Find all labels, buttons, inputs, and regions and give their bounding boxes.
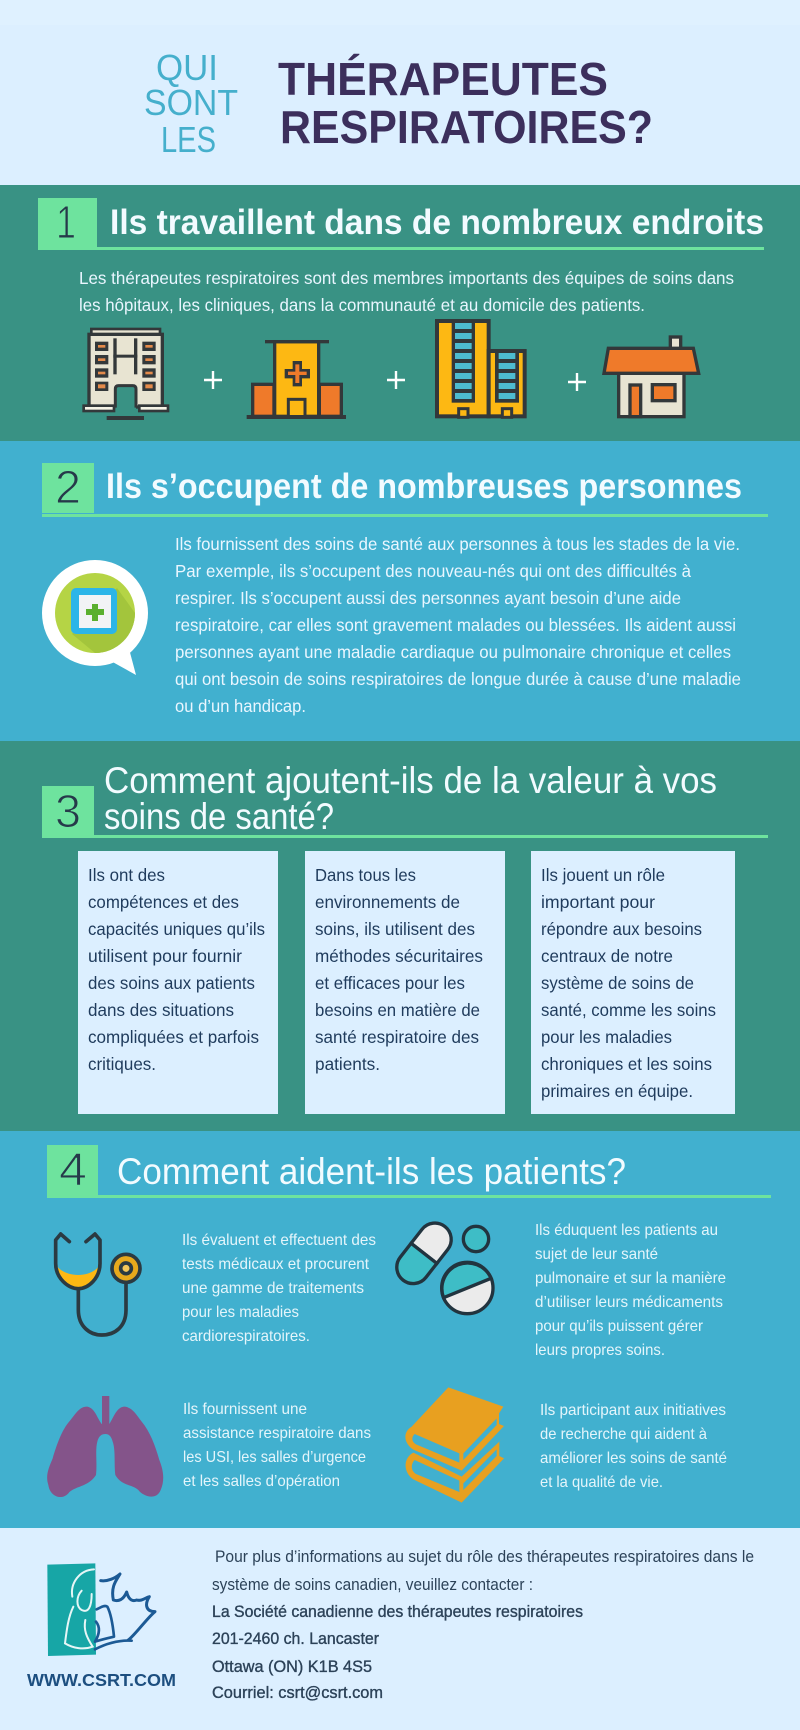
title: thérapeutes respiratoires: THÉRAPEUTES xyxy=(278,53,608,105)
text: tests and treatments xyxy=(182,1232,376,1345)
section 2 body text: qui ont besoin de soins respiratoires de longue durée à cause d’une maladie xyxy=(175,669,741,689)
section 2 heading: 2 xyxy=(55,461,81,513)
section 1 heading: Ils travaillent dans de nombreux endroits xyxy=(110,203,764,242)
footer contact text: système de soins canadien, veuillez contacter : xyxy=(212,1576,533,1594)
section 2 body text: Par exemple, ils s’occupent des nouveau-nés qui ont des difficultés à xyxy=(175,561,691,581)
section 2 body text: ou d’un handicap. xyxy=(175,696,306,716)
section 2 body text: respirer. Ils s’occupent aussi des personnes ayant besoin d’une aide xyxy=(175,588,681,608)
text: research: Ils participant aux initiatives xyxy=(540,1402,726,1419)
icon: speech bubble with medical cross xyxy=(42,560,148,675)
section 1 body text: Les thérapeutes respiratoires sont des membres importants des équipes de soins dans xyxy=(79,268,734,288)
panel: section 3 value xyxy=(0,741,800,1131)
card: safe methods xyxy=(305,851,505,1114)
card: skills: Ils ont des xyxy=(88,865,165,885)
text: patient education xyxy=(535,1222,726,1359)
panel: title header xyxy=(0,0,800,185)
icon: plus xyxy=(204,371,222,389)
title: qui sont les xyxy=(144,47,238,160)
card: safe methods: patients. xyxy=(315,1054,380,1074)
text: respiratory assistance: assistance respiratoire dans xyxy=(183,1425,371,1442)
logo: CSRT: WWW.CSRT.COM xyxy=(27,1670,176,1690)
card: skills: dans des situations xyxy=(88,1000,234,1020)
section 4 heading xyxy=(47,1143,771,1198)
icon: lungs xyxy=(47,1396,163,1497)
card: central needs: santé, comme les soins xyxy=(541,1000,716,1020)
footer contact text: 201-2460 ch. Lancaster xyxy=(212,1630,379,1648)
text: tests and treatments: Ils évaluent et effectuent des xyxy=(182,1232,376,1249)
text: tests and treatments: cardiorespiratoires. xyxy=(182,1328,310,1345)
icon: books xyxy=(405,1387,504,1503)
text: respiratory assistance: et les salles d’opération xyxy=(183,1473,340,1490)
footer contact text: La Société canadienne des thérapeutes respiratoires xyxy=(212,1603,583,1621)
text: research: de recherche qui aident à xyxy=(540,1426,707,1443)
icon: pills xyxy=(390,1216,493,1314)
text: patient education: sujet de leur santé xyxy=(535,1246,658,1263)
text: patient education: leurs propres soins. xyxy=(535,1342,665,1359)
card: central needs: centraux de notre xyxy=(541,946,673,966)
section 1 heading xyxy=(38,196,764,250)
card: central needs: répondre aux besoins xyxy=(541,919,702,939)
text: patient education: pulmonaire et sur la manière xyxy=(535,1270,726,1287)
card: safe methods: santé respiratoire des xyxy=(315,1027,479,1047)
card: safe methods: Dans tous les xyxy=(315,865,416,885)
section 4 heading: 4 xyxy=(59,1143,87,1195)
text: tests and treatments: tests médicaux et procurent xyxy=(182,1256,370,1273)
icon: stethoscope xyxy=(56,1234,140,1335)
title: qui sont les: LES xyxy=(161,119,216,160)
card: skills: utilisent pour fournir xyxy=(88,946,242,966)
text: research xyxy=(540,1402,727,1491)
text: respiratory assistance: Ils fournissent une xyxy=(183,1401,307,1418)
footer contact text: Courriel: csrt@csrt.com xyxy=(212,1684,383,1702)
text: patient education: d’utiliser leurs médicaments xyxy=(535,1294,723,1311)
section 1 body text xyxy=(79,268,734,315)
panel: footer contact xyxy=(0,1528,800,1730)
icon: office towers xyxy=(437,320,525,417)
section 4 heading: Comment aident-ils les patients? xyxy=(117,1151,626,1192)
section 2 body text: respiratoire, car elles sont gravement malades ou blessées. Ils aident aussi xyxy=(175,615,736,635)
card: safe methods: besoins en matière de xyxy=(315,1000,480,1020)
footer contact text xyxy=(212,1548,754,1702)
card: central needs xyxy=(531,851,735,1114)
card: safe methods: environnements de xyxy=(315,892,460,912)
text: respiratory assistance xyxy=(183,1401,371,1490)
section 2 body text: personnes ayant une maladie cardiaque ou pulmonaire chronique et celles xyxy=(175,642,731,662)
text: patient education: Ils éduquent les patients au xyxy=(535,1222,718,1239)
icon: plus xyxy=(387,371,405,389)
card: skills: critiques. xyxy=(88,1054,156,1074)
text: patient education: pour qu’ils puissent gérer xyxy=(535,1318,704,1335)
card: safe methods: soins, ils utilisent des xyxy=(315,919,475,939)
title: qui sont les: SONT xyxy=(144,82,238,123)
panel: section 2 people xyxy=(0,441,800,741)
icon: hospital xyxy=(84,329,168,420)
card: safe methods: et efficaces pour les xyxy=(315,973,465,993)
card: central needs: Ils jouent un rôle xyxy=(541,865,665,885)
section 1 heading: 1 xyxy=(56,196,76,248)
icon: clinic xyxy=(247,340,346,419)
icon: house xyxy=(604,337,699,417)
section 3 heading: 3 xyxy=(55,785,81,837)
card: central needs: primaires en équipe. xyxy=(541,1081,693,1101)
title: thérapeutes respiratoires xyxy=(278,53,653,153)
title: thérapeutes respiratoires: RESPIRATOIRES? xyxy=(280,101,653,153)
card: skills: compétences et des xyxy=(88,892,239,912)
section 1 body text: les hôpitaux, les cliniques, dans la communauté et au domicile des patients. xyxy=(79,295,645,315)
card: skills xyxy=(78,851,278,1114)
card: central needs: système de soins de xyxy=(541,973,694,993)
card: central needs: important pour xyxy=(541,892,655,912)
card: skills: compliquées et parfois xyxy=(88,1027,259,1047)
icon: plus xyxy=(568,373,586,391)
logo: CSRT xyxy=(27,1563,176,1690)
text: research: et la qualité de vie. xyxy=(540,1474,663,1491)
title: qui sont les: QUI xyxy=(156,47,218,88)
section 2 heading: Ils s’occupent de nombreuses personnes xyxy=(106,467,742,506)
panel: section 4 patients xyxy=(0,1131,800,1528)
card: skills: des soins aux patients xyxy=(88,973,255,993)
section 3 heading xyxy=(42,760,768,838)
text: tests and treatments: une gamme de traitements xyxy=(182,1280,364,1297)
footer contact text: Pour plus d’informations au sujet du rôle des thérapeutes respiratoires dans le xyxy=(215,1548,754,1566)
panel: section 1 workplaces xyxy=(0,185,800,441)
section 2 body text: Ils fournissent des soins de santé aux personnes à tous les stades de la vie. xyxy=(175,534,740,554)
text: respiratory assistance: les USI, les salles d’urgence xyxy=(183,1449,366,1466)
card: central needs: pour les maladies xyxy=(541,1027,672,1047)
text: tests and treatments: pour les maladies xyxy=(182,1304,299,1321)
section 3 heading: soins de santé? xyxy=(104,796,334,837)
card: safe methods: méthodes sécuritaires xyxy=(315,946,483,966)
footer contact text: Ottawa (ON) K1B 4S5 xyxy=(212,1658,372,1676)
section 2 body text xyxy=(175,534,741,716)
section 3 heading: Comment ajoutent-ils de la valeur à vos xyxy=(104,760,717,801)
text: research: améliorer les soins de santé xyxy=(540,1450,727,1467)
section 2 heading xyxy=(42,461,768,517)
card: central needs: chroniques et les soins xyxy=(541,1054,712,1074)
card: skills: capacités uniques qu’ils xyxy=(88,919,265,939)
